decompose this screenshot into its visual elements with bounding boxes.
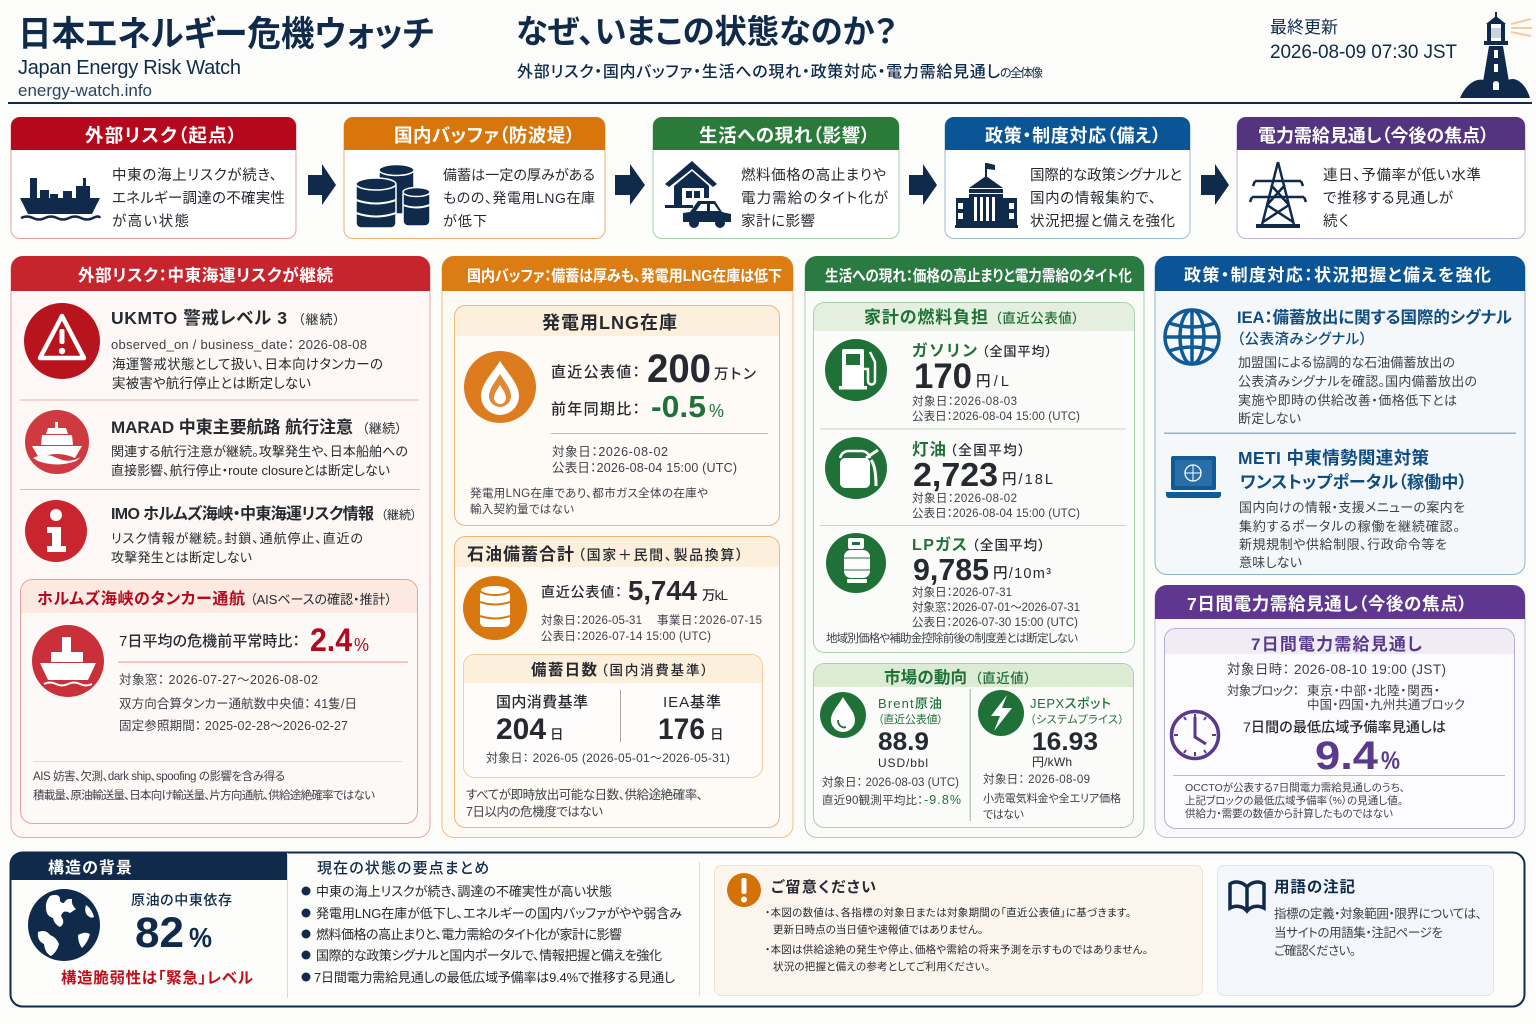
section: key points: 燃料価格の高止まりと、電力需給のタイト化が家計に影響 <box>316 927 622 942</box>
card: market trends: USD/bbl <box>878 756 928 770</box>
card: household fuel burden: 対象窓：2026-07-01～2026-07-31 <box>912 601 1080 614</box>
box: glossary: 当サイトの用語集・注記ページを <box>1274 925 1443 940</box>
card: oil reserves: すべてが即時放出可能な日数、供給途絶確率、 <box>466 787 703 802</box>
item: IMO <box>111 504 417 565</box>
header rule <box>8 102 1532 104</box>
card: market trends: 対象日： 2026-08-03 (UTC) <box>822 776 959 789</box>
card: 7-day outlook: 7日間の最低広域予備率見通しは <box>1243 719 1446 735</box>
card: market trends: ではない <box>983 808 1024 821</box>
english subtitle: Japan Energy Risk Watch <box>18 57 241 79</box>
card: household fuel burden: 家計の燃料負担 <box>864 307 988 327</box>
item: UKMTO: observed_on / business_date： 2026-08-08 <box>111 337 367 352</box>
card: household fuel burden: （全国平均） <box>972 538 1045 553</box>
section: structural background <box>28 858 254 987</box>
heading: 電力需給見通し（今後の焦点） <box>1258 125 1489 146</box>
description <box>112 167 285 230</box>
box: glossary: 指標の定義・対象範囲・限界については、 <box>1274 906 1482 921</box>
description <box>443 167 595 229</box>
arrow <box>1201 164 1229 205</box>
card: household fuel burden: （直近公表値） <box>995 310 1079 326</box>
icon: information <box>25 500 87 562</box>
card: reserve days: （国内消費基準） <box>601 662 708 678</box>
item: METI: 新規規制や供給制限、行政命令等を <box>1239 537 1447 552</box>
card: 7-day outlook: % <box>1381 747 1400 775</box>
item: UKMTO: 海運警戒状態として扱い、日本向けタンカーの <box>112 357 383 372</box>
description: 備蓄は一定の厚みがある <box>443 167 595 183</box>
card: oil reserves: 7日以内の危機度ではない <box>466 804 603 819</box>
heading: 国内バッファ：備蓄は厚みも、発電用LNG在庫は低下 <box>467 266 782 285</box>
item: UKMTO: UKMTO 警戒レベル 3 <box>111 308 287 328</box>
box: glossary <box>1218 866 1494 996</box>
description: 国内の情報集約で、 <box>1030 190 1156 207</box>
icon: crude oil drop <box>820 692 866 738</box>
icon: tanker <box>32 625 104 697</box>
card: market trends: 小売電気料金や全エリア価格 <box>983 791 1121 805</box>
icon: open book <box>1230 882 1264 911</box>
card: household fuel burden: 円/18L <box>1002 472 1053 488</box>
icon: flame drop <box>464 351 536 423</box>
card: 7-day outlook: 対象ブロック： <box>1227 683 1299 698</box>
icon: storage barrels <box>356 164 430 228</box>
item: METI: 国内向けの情報・支援メニューの案内を <box>1239 500 1465 515</box>
description: 燃料価格の高止まりや <box>741 166 886 184</box>
card: household fuel burden: （全国平均） <box>982 344 1052 359</box>
icon: transmission tower <box>1250 162 1306 226</box>
heading: 7日間電力需給見通し（今後の焦点） <box>1187 594 1467 614</box>
detail lines: 対象窓： 2026-07-27～2026-08-02 <box>119 673 318 687</box>
card: LNG stock: 直近公表値： <box>551 363 640 381</box>
heading: 外部リスク：中東海運リスクが継続 <box>78 265 334 285</box>
box: caution: ・本図は供給途絶の発生や停止、価格や需給の将来予測を示すものではありません。 <box>765 943 1148 956</box>
card: reserve days: 対象日： 2026-05 (2026-05-01～2026-05-31) <box>486 751 730 765</box>
card: 7-day outlook: OCCTOが公表する7日間電力需給見通しのうち、 <box>1185 781 1405 794</box>
icon: gas pump <box>825 339 887 401</box>
question subheading: 外部リスク・国内バッファ・生活への現れ・政策対応・電力需給見通し <box>517 63 1000 81</box>
card: household fuel burden: 2,723 <box>913 456 998 493</box>
card: household fuel burden: LPガス <box>912 536 967 554</box>
card: oil reserves: 直近公表値： <box>541 584 622 600</box>
panel: bottom summary <box>10 852 1524 1006</box>
panel: domestic buffer <box>442 256 793 838</box>
item: IEA: IEA：備蓄放出に関する国際的シグナル <box>1237 307 1512 327</box>
item: UKMTO: （継続） <box>298 312 340 327</box>
flow card: external risk <box>11 117 296 238</box>
box: caution <box>714 866 1202 996</box>
heading: 生活への現れ（影響） <box>699 125 870 146</box>
icon: lightning <box>978 690 1024 736</box>
icon: alert triangle <box>24 303 100 379</box>
card: oil reserves: 事業日：2026-07-15 <box>657 614 762 627</box>
card: oil reserves <box>454 536 780 828</box>
item: IMO: リスク情報が継続。封鎖、通航停止、直近の <box>111 531 363 546</box>
icon: clock <box>1172 712 1218 758</box>
ratio headline: 7日平均の危機前平常時比： <box>119 633 300 650</box>
site address: energy-watch.info <box>18 81 152 100</box>
card: market trends: （システムプライス） <box>1030 713 1124 726</box>
icon: oil drum <box>463 576 527 640</box>
card: household fuel burden: 灯油 <box>912 440 946 459</box>
item: IMO: 攻撃発生とは断定しない <box>111 550 252 565</box>
card: reserve days: 204 <box>496 713 546 746</box>
card: LNG stock: -0.5 <box>651 389 706 424</box>
box: caution: ご留意ください <box>771 878 876 896</box>
card: market trends: 円/kWh <box>1032 755 1072 769</box>
description: ものの、発電用LNG在庫 <box>443 190 595 206</box>
description: 国際的な政策シグナルと <box>1030 167 1182 184</box>
icon: exclamation <box>727 873 761 907</box>
card: market trends: （直近公表値） <box>878 713 943 726</box>
item: IEA <box>1237 307 1512 426</box>
card: LNG stock: 200 <box>647 347 711 391</box>
card: market trends <box>814 664 1134 828</box>
section: key points: 発電用LNG在庫が低下し、エネルギーの国内バッファがやや弱含み <box>316 906 682 921</box>
description <box>1323 167 1481 230</box>
card: household fuel burden: 公表日：2026-08-04 15:00 (UTC) <box>912 507 1080 520</box>
heading: 政策・制度対応：状況把握と備えを強化 <box>1184 265 1491 285</box>
box: caution: 更新日時点の当日値や速報値ではありません。 <box>773 923 983 936</box>
card: 7-day outlook: 東京・中部・北陸・関西・ <box>1307 683 1440 698</box>
section: structural background: 82 <box>135 909 184 957</box>
item: UKMTO <box>111 308 383 391</box>
card: household fuel burden: 9,785 <box>913 552 989 587</box>
card: 7-day outlook: 対象日時： 2026-08-10 19:00 (JST) <box>1227 662 1446 677</box>
description: が低下 <box>443 213 487 229</box>
card: household fuel burden: 170 <box>914 357 972 396</box>
description: 家計に影響 <box>741 213 815 230</box>
card: oil reserves: 万kL <box>702 588 728 603</box>
card: 7-day outlook: 9.4 <box>1315 734 1379 778</box>
card: household fuel burden: 円/L <box>976 374 1009 390</box>
caveat: AIS 妨害、欠測、dark ship、spoofing の影響を含み得る <box>33 769 285 783</box>
card: market trends: -9.8% <box>924 793 961 807</box>
card: market trends: 直近90観測平均比： <box>822 793 923 807</box>
card: 7-day outlook <box>1164 628 1514 828</box>
card: oil reserves: 公表日：2026-07-14 15:00 (UTC) <box>541 630 711 643</box>
icon: globe <box>1165 310 1219 364</box>
card: LNG stock: 公表日：2026-08-04 15:00 (UTC) <box>552 461 737 475</box>
card: 7-day outlook: 7日間電力需給見通し <box>1251 635 1422 654</box>
icon: laptop <box>1166 456 1221 498</box>
icon: lighthouse <box>1460 12 1532 98</box>
section: key points <box>302 859 682 985</box>
box: caution: ・本図の数値は、各指標の対象日または対象期間の「直近公表値」に基づきます。 <box>765 906 1131 919</box>
item: MARAD: （継続） <box>362 421 402 436</box>
card: market trends: （直近値） <box>975 671 1031 686</box>
item: METI: 意味しない <box>1239 555 1302 570</box>
item: IEA: 実施や即時の供給改善・価格低下とは <box>1238 393 1457 408</box>
section: key points: 現在の状態の要点まとめ <box>317 859 489 877</box>
card: reserve days: 日 <box>550 727 564 742</box>
icon: government building <box>955 163 1018 228</box>
icon: earth <box>28 889 100 961</box>
card: household fuel burden: （全国平均） <box>950 443 1025 458</box>
section: structural background: % <box>189 922 212 953</box>
description: 中東の海上リスクが続き、 <box>112 167 277 184</box>
flow card: policy <box>945 117 1190 238</box>
item: MARAD: 直接影響、航行停止・route closureとは断定しない <box>111 463 390 478</box>
arrow <box>909 164 937 205</box>
card: LNG stock <box>454 306 780 526</box>
card: Hormuz tanker traffic: 積載量、原油輸送量、日本向け輸送量、片方向通航、供給途絶確率ではない <box>33 788 375 802</box>
card: household fuel burden: 対象日：2026-08-02 <box>912 492 1017 505</box>
item: IEA: 加盟国による協調的な石油備蓄放出の <box>1238 355 1455 370</box>
update date: 2026-08-09 07:30 JST <box>1270 42 1457 63</box>
card: market trends: Brent原油 <box>878 696 942 711</box>
card: market trends: 16.93 <box>1032 728 1098 756</box>
card: reserve days <box>464 654 762 778</box>
arrow <box>308 164 336 205</box>
card: reserve days: 日 <box>710 727 724 742</box>
card: LNG stock: 前年同期比： <box>551 401 640 418</box>
heading: 外部リスク（起点） <box>85 125 237 146</box>
card: 7-day outlook: 供給力・需要の数値から計算したものではない <box>1185 807 1393 820</box>
card: market trends: 市場の動向 <box>884 667 967 687</box>
card: household fuel burden: 公表日：2026-08-04 15:00 (UTC) <box>912 410 1080 423</box>
card: reserve days: 176 <box>658 713 705 746</box>
item: IEA: 断定しない <box>1238 411 1301 426</box>
icon: ship <box>20 178 100 220</box>
description <box>1030 167 1182 230</box>
card: Hormuz tanker traffic: 2.4 <box>310 622 352 658</box>
item: MARAD <box>111 418 408 478</box>
card: oil reserves: 5,744 <box>628 575 697 606</box>
flow card: daily life <box>653 117 899 238</box>
description: が高い状態 <box>112 213 189 230</box>
card: oil reserves: （国家＋民間、製品換算） <box>578 547 743 563</box>
box: glossary: ご確認ください。 <box>1274 943 1356 958</box>
item: IEA: 公表済みシグナルを確認。国内備蓄放出の <box>1238 374 1477 389</box>
description: で推移する見通しが <box>1323 190 1454 207</box>
card: household fuel burden: 円/10m³ <box>993 566 1051 582</box>
section: key points: 国際的な政策シグナルと国内ポータルで、情報把握と備えを強化 <box>316 948 662 963</box>
section: key points: 7日間電力需給見通しの最低広域予備率は9.4%で推移する見通し <box>314 970 675 985</box>
card: LNG stock: 万トン <box>714 367 756 383</box>
card: LNG stock: 輸入契約量ではない <box>470 502 574 516</box>
card: household fuel burden: 対象日：2026-08-03 <box>912 395 1017 408</box>
card: household fuel burden: ガソリン <box>912 342 978 360</box>
update label: 最終更新 <box>1270 18 1338 37</box>
heading: 生活への現れ：価格の高止まりと電力需給のタイト化 <box>825 266 1132 285</box>
card: household fuel burden: 公表日：2026-07-30 15:00 (UTC) <box>912 616 1078 629</box>
section: structural background: 原油の中東依存 <box>131 892 232 908</box>
card: Hormuz tanker traffic: 双方向合算タンカー通航数中央値： 41隻/日 <box>119 696 357 711</box>
card: Hormuz tanker traffic <box>20 580 418 824</box>
box: caution: 状況の把握と備えの参考としてご利用ください。 <box>773 960 990 973</box>
card: household fuel burden <box>814 302 1134 652</box>
header <box>18 12 1532 100</box>
item: IEA: （公表済みシグナル） <box>1237 330 1367 348</box>
card: Hormuz tanker traffic: % <box>354 635 369 655</box>
flow card: domestic buffer <box>344 117 605 238</box>
card: reserve days: IEA基準 <box>663 694 721 711</box>
icon: house and car <box>665 161 731 228</box>
box: glossary: 用語の注記 <box>1274 878 1355 896</box>
description: 続く <box>1323 213 1349 230</box>
item: MARAD: 関連する航行注意が継続。攻撃発生や、日本船舶への <box>111 444 408 459</box>
item: IMO: （継続） <box>381 508 417 522</box>
description: 電力需給のタイト化が <box>741 190 889 207</box>
item: MARAD: MARAD 中東主要航路 航行注意 <box>111 418 353 437</box>
heading: 政策・制度対応（備え） <box>985 126 1161 146</box>
card: market trends: 88.9 <box>878 728 929 756</box>
heading: 国内バッファ（防波堤） <box>394 125 575 146</box>
flow card: power outlook <box>1237 117 1525 238</box>
card: Hormuz tanker traffic: 固定参照期間： 2025-02-28～2026-02-27 <box>119 719 348 733</box>
item: UKMTO: 実被害や航行停止とは断定しない <box>112 376 311 391</box>
item: METI: 集約するポータルの稼働を継続確認。 <box>1239 519 1460 534</box>
card heading: ホルムズ海峡のタンカー通航 <box>37 589 245 608</box>
card: Hormuz tanker traffic: （AISベースの確認・推計） <box>250 592 392 607</box>
card: LNG stock: % <box>709 401 724 421</box>
section: structural background: 構造の背景 <box>48 858 132 877</box>
icon: ship <box>25 410 89 474</box>
description: 状況把握と備えを強化 <box>1030 213 1176 230</box>
icon: kerosene can <box>825 437 887 499</box>
card: LNG stock: 発電用LNG在庫であり、都市ガス全体の在庫や <box>470 486 708 500</box>
panel: external risk <box>11 256 430 838</box>
item: IMO: IMO ホルムズ海峡・中東海運リスク情報 <box>111 504 374 523</box>
card: household fuel burden: 地域別価格や補助金控除前後の制度差とは断定しない <box>826 631 1078 645</box>
icon: gas cylinder <box>826 533 886 593</box>
item: METI: ワンストップポータル（稼働中） <box>1240 472 1467 492</box>
card: reserve days: 備蓄日数 <box>531 661 597 679</box>
description <box>741 166 889 230</box>
card: oil reserves: 石油備蓄合計 <box>467 545 574 564</box>
item: METI <box>1238 448 1467 570</box>
card: market trends: JEPXスポット <box>1030 696 1111 711</box>
card: LNG stock: 対象日：2026-08-02 <box>552 445 668 459</box>
card: 7-day outlook: 中国・四国・九州共通ブロック <box>1307 697 1465 712</box>
main question heading: なぜ、いまこの状態なのか？ <box>516 13 897 50</box>
section: structural background: 構造脆弱性は「緊急」レベル <box>61 968 254 987</box>
panel: power outlook <box>1155 585 1525 838</box>
section: key points: 中東の海上リスクが続き、調達の不確実性が高い状態 <box>316 884 612 899</box>
card: 7-day outlook: 上記ブロックの最低広域予備率（%）の見通し値。 <box>1185 794 1403 807</box>
card: LNG stock: 発電用LNG在庫 <box>542 312 677 333</box>
item: METI: METI 中東情勢関連対策 <box>1238 448 1430 468</box>
title: 日本エネルギー危機ウォッチ <box>18 15 434 54</box>
card: oil reserves: 対象日：2026-05-31 <box>541 614 642 627</box>
question subheading tail: の全体像 <box>1000 66 1043 80</box>
card: reserve days: 国内消費基準 <box>496 694 588 711</box>
panel: policy <box>1155 256 1525 574</box>
card: market trends: 対象日： 2026-08-09 <box>983 773 1090 786</box>
description: 連日、予備率が低い水準 <box>1323 167 1481 184</box>
card: household fuel burden: 対象日：2026-07-31 <box>912 586 1012 599</box>
description: エネルギー調達の不確実性 <box>112 190 285 207</box>
panel: daily life <box>805 256 1144 838</box>
arrow <box>615 164 645 205</box>
